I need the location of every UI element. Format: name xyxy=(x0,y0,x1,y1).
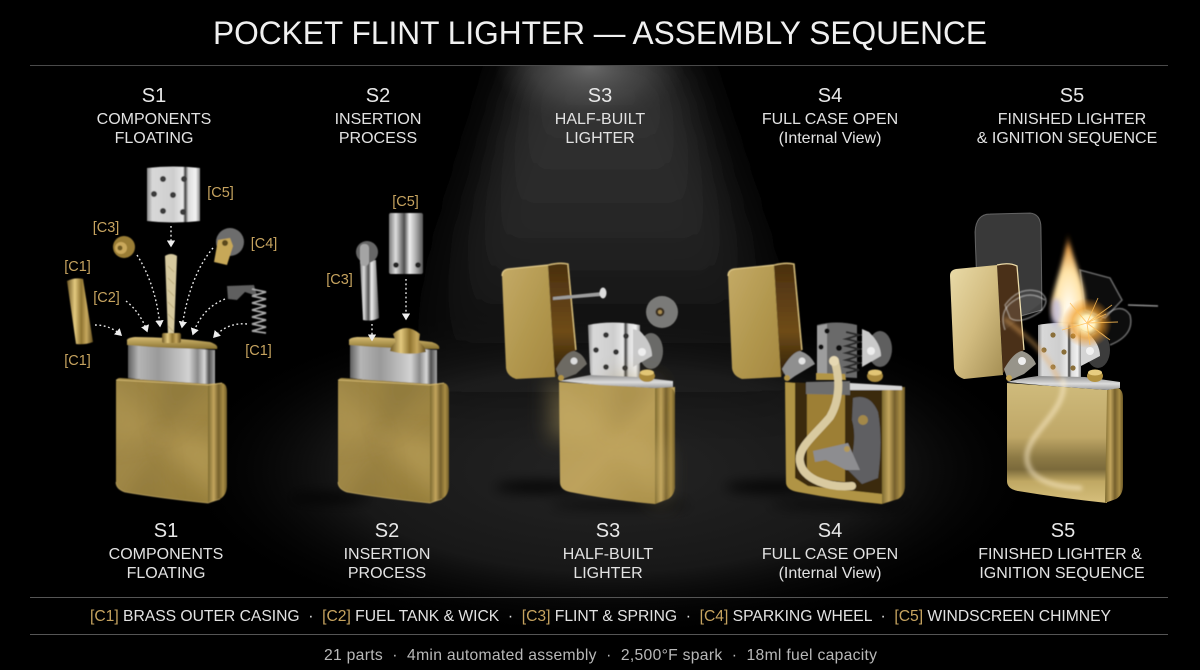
C3 flint nut xyxy=(113,236,135,258)
panel: S1 bottom caption: COMPONENTS xyxy=(109,546,223,563)
panel: S5 bottom caption: S5 xyxy=(1051,520,1075,542)
labels: S2 components: [C3] xyxy=(326,272,353,288)
panel: S2 bottom caption xyxy=(344,520,430,582)
panel: S4 top caption: FULL CASE OPEN xyxy=(762,111,898,128)
panel: S4 top caption xyxy=(762,85,898,147)
panel: S5 top caption: S5 xyxy=(1060,85,1084,107)
panel: S1 top caption: COMPONENTS xyxy=(97,111,211,128)
lighter: S4 internal view xyxy=(728,263,905,504)
chimney xyxy=(1038,323,1081,380)
labels: S1 components: [C3] xyxy=(93,220,119,236)
lighter: S3 half-built xyxy=(502,263,678,510)
open lid and hinge xyxy=(728,263,815,381)
panel: S4 bottom caption: FULL CASE OPEN xyxy=(762,546,898,563)
C1 brass rod xyxy=(67,278,93,344)
panel: S5 bottom caption: FINISHED LIGHTER & xyxy=(978,546,1142,563)
labels: S2 components: [C5] xyxy=(392,194,419,210)
flame xyxy=(1051,233,1085,327)
lighter: S2 insertion xyxy=(322,213,449,515)
chimney cutaway xyxy=(817,322,857,378)
brass outer casing xyxy=(322,365,449,515)
floating screw xyxy=(553,288,606,300)
panel: S5 top caption: & IGNITION SEQUENCE xyxy=(977,130,1157,147)
labels: S1 components: [C1] xyxy=(245,343,272,359)
panel: S3 top caption: LIGHTER xyxy=(565,130,635,147)
ghost lid motion trail xyxy=(975,213,1042,322)
panel: S4 top caption: (Internal View) xyxy=(779,130,881,147)
panel: S1 top caption xyxy=(97,85,211,147)
floating wheel xyxy=(646,296,678,328)
brass outer casing xyxy=(100,365,227,515)
lighter: S5 ignition xyxy=(950,213,1158,503)
panel: S3 bottom caption xyxy=(563,520,653,582)
wheel and cam xyxy=(633,329,663,369)
panel: S1 bottom caption: FLOATING xyxy=(127,565,205,582)
labels: S1 components xyxy=(64,185,277,369)
fuel tank xyxy=(127,337,217,386)
wick xyxy=(800,362,852,486)
panel: S5 top caption: FINISHED LIGHTER xyxy=(998,111,1146,128)
panel: S1 bottom caption: S1 xyxy=(154,520,178,542)
flint arm xyxy=(227,285,257,300)
panel: S5 bottom caption: IGNITION SEQUENCE xyxy=(979,565,1145,582)
labels: S1 components: [C2] xyxy=(93,290,120,306)
panel: S2 top caption: INSERTION xyxy=(335,111,421,128)
title: POCKET FLINT LIGHTER — ASSEMBLY SEQUENCE xyxy=(213,15,987,51)
panel: S3 bottom caption: HALF-BUILT xyxy=(563,546,653,563)
C3 flint tube xyxy=(356,241,379,321)
polished open lid xyxy=(950,264,1036,381)
panel: S4 top caption: S4 xyxy=(818,85,842,107)
labels: S1 components: [C1] xyxy=(64,259,91,275)
panel: S4 bottom caption xyxy=(762,520,898,582)
lighter: S1 exploded components xyxy=(67,166,266,515)
panel: S4 bottom caption: (Internal View) xyxy=(779,565,881,582)
background and spotlight xyxy=(272,66,948,600)
C4 sparking wheel xyxy=(214,228,244,265)
panel: S4 bottom caption: S4 xyxy=(818,520,842,542)
panel: S1 top caption: S1 xyxy=(142,85,166,107)
case, insert and open lid xyxy=(502,263,675,510)
panel: S3 bottom caption: LIGHTER xyxy=(573,565,643,582)
smoke and ghost mechanism xyxy=(1003,270,1158,345)
floor shadows xyxy=(290,481,910,509)
spring xyxy=(846,332,859,373)
panel: S1 bottom caption xyxy=(109,520,223,582)
polished case xyxy=(1007,370,1123,503)
arrows: S1 xyxy=(95,226,247,337)
spark burst xyxy=(1062,298,1112,348)
brass case shell with interior xyxy=(785,370,905,504)
panel: S2 top caption: S2 xyxy=(366,85,390,107)
mechanism levers xyxy=(813,397,880,484)
panel: S1 top caption: FLOATING xyxy=(115,130,193,147)
spring xyxy=(252,289,266,333)
panel: S3 top caption: S3 xyxy=(588,85,612,107)
panel: S3 top caption xyxy=(555,85,645,147)
wheel and cam xyxy=(1081,330,1110,368)
panel: S3 bottom caption: S3 xyxy=(596,520,620,542)
wheel and cam xyxy=(862,329,892,367)
panel: S2 bottom caption: S2 xyxy=(375,520,399,542)
labels: S1 components: [C5] xyxy=(207,185,234,201)
flame base blue glow xyxy=(1051,298,1061,326)
C5 cylinder xyxy=(389,213,423,274)
panel: S2 bottom caption: PROCESS xyxy=(348,565,426,582)
legend: [C1] BRASS OUTER CASING · [C2] FUEL TANK & WICK · [C3] FLINT & SPRING · [C4] SPARKING WHEEL · [C5] WINDSCREEN CHIMNEY xyxy=(90,608,1112,625)
arrows: S2 xyxy=(372,279,406,340)
wick and collar xyxy=(162,254,181,343)
spark rays xyxy=(1062,298,1118,345)
labels: S2 components xyxy=(326,194,419,288)
labels: S1 components: [C1] xyxy=(64,353,91,369)
fuel vapour trail xyxy=(1006,320,1080,488)
chimney xyxy=(588,322,640,380)
C5 chimney with holes xyxy=(147,166,200,222)
footer stats: 21 parts · 4min automated assembly · 2,500°F spark · 18ml fuel capacity xyxy=(324,647,877,664)
panel: S5 bottom caption xyxy=(978,520,1145,582)
panel: S3 top caption: HALF-BUILT xyxy=(555,111,645,128)
wick tip xyxy=(829,356,839,366)
fuel tank xyxy=(349,337,439,386)
brass collar xyxy=(390,328,426,354)
labels: S1 components: [C4] xyxy=(251,236,277,252)
panel: S2 bottom caption: INSERTION xyxy=(344,546,430,563)
panel: S2 top caption: PROCESS xyxy=(339,130,417,147)
panel: S2 top caption xyxy=(335,85,421,147)
panel: S5 top caption xyxy=(977,85,1157,147)
